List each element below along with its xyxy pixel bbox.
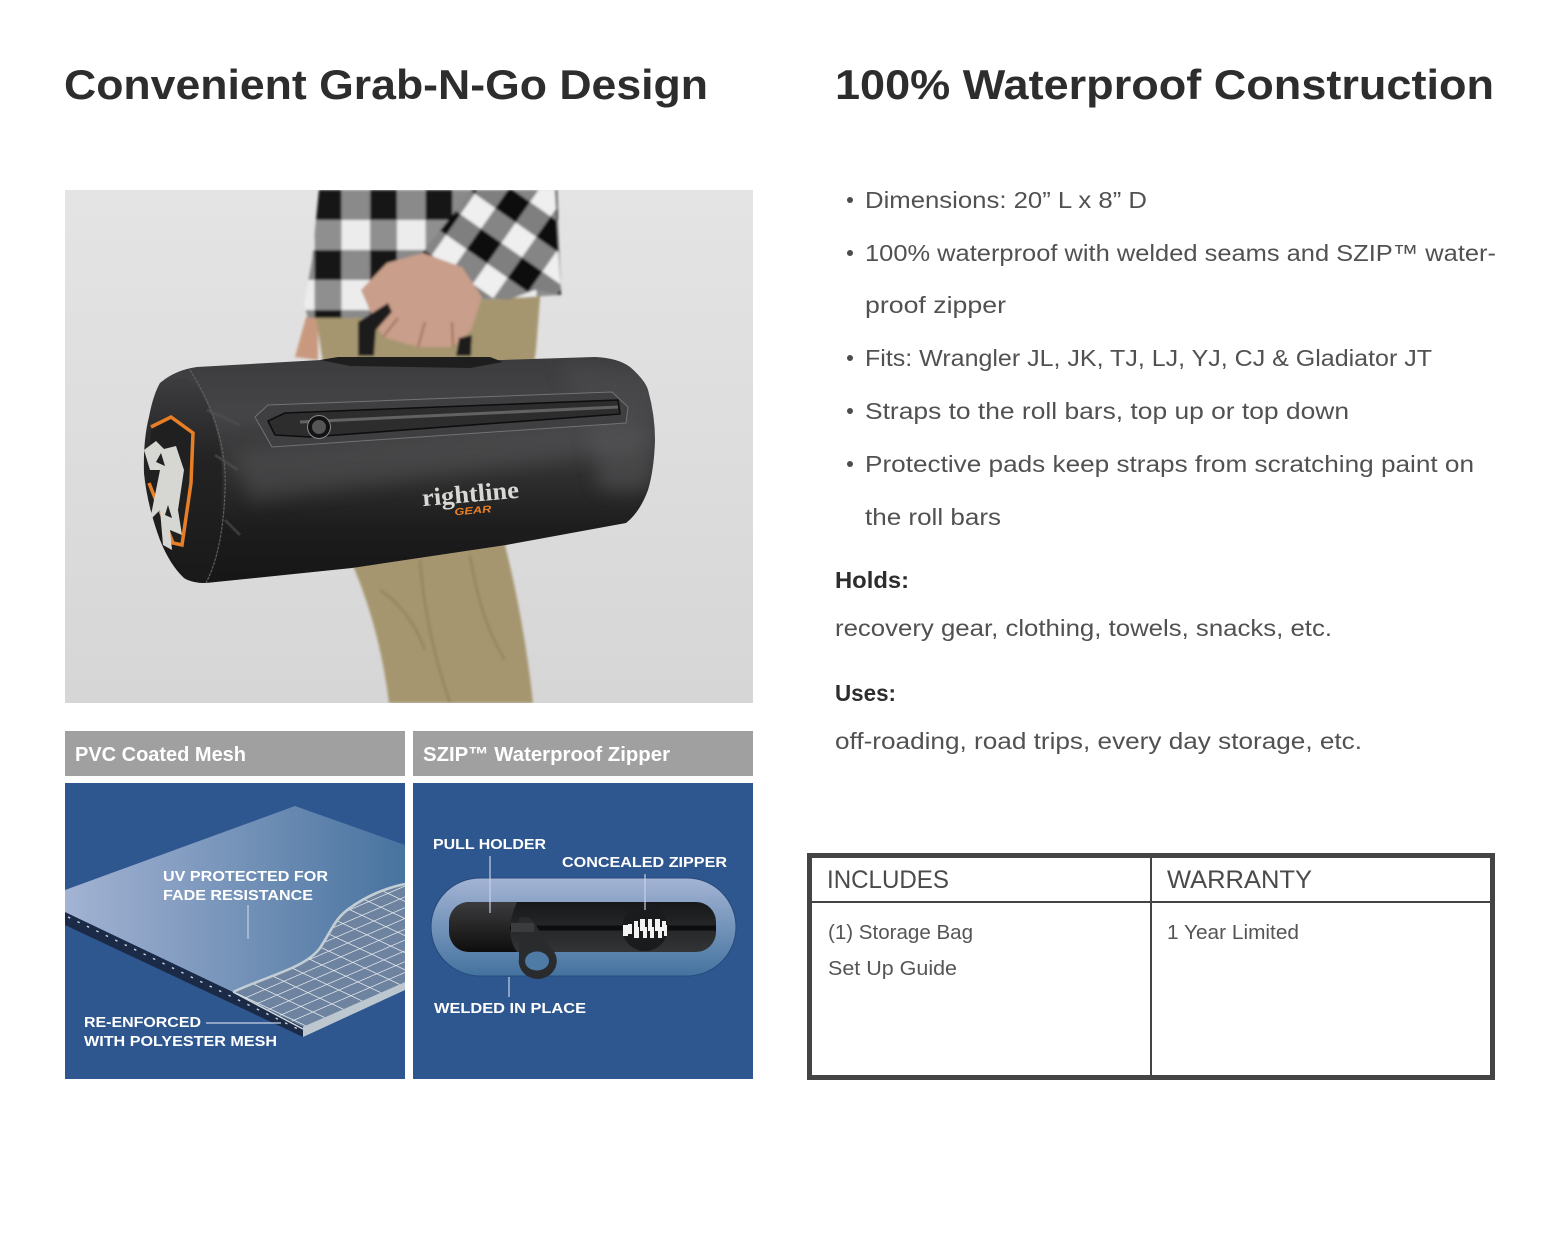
- edge stitching: [68, 917, 300, 1030]
- welded pill surround: [431, 878, 736, 976]
- text block: uses: off-roading, road trips, every day storage, etc.: [835, 728, 1362, 754]
- zipper: [255, 392, 628, 447]
- trouser folds: [380, 555, 505, 703]
- table: includes and warranty: INCLUDES: [827, 866, 949, 894]
- mesh outer edge: [303, 982, 405, 1037]
- feature bullet list: Straps to the roll bars, top up or top down: [865, 398, 1349, 424]
- exposed polyester mesh: [233, 884, 405, 1027]
- bag end cap: [144, 378, 222, 583]
- text block: uses: [835, 680, 1362, 754]
- header: PVC Coated Mesh: [65, 731, 405, 776]
- label: re-enforced mesh: [84, 1015, 281, 1050]
- header: PVC Coated Mesh: PVC Coated Mesh: [75, 743, 246, 766]
- bag handle strap: [358, 303, 472, 356]
- label: re-enforced mesh: RE-ENFORCED: [84, 1015, 201, 1031]
- text block: holds: [835, 567, 1332, 641]
- feature bullet list: [847, 187, 1496, 530]
- UV protected top sheet: [65, 806, 405, 992]
- text block: holds: recovery gear, clothing, towels, snacks, etc.: [835, 615, 1332, 641]
- text block: uses: Uses:: [835, 680, 896, 706]
- label: pull holder: [433, 837, 547, 913]
- bag wordmark: rightline: [421, 477, 520, 512]
- storage bag: [144, 357, 660, 583]
- zipper pull tab: [511, 917, 557, 979]
- feature bullet list: the roll bars: [865, 504, 1001, 530]
- label: UV protected: UV PROTECTED FOR: [163, 869, 329, 885]
- title: Convenient Grab-N-Go Design: Convenient Grab-N-Go Design: [64, 61, 708, 108]
- handle base patch: [320, 357, 503, 368]
- title: 100% Waterproof Construction: 100% Waterproof Construction: [835, 61, 1494, 108]
- header: SZIP Waterproof Zipper: [413, 731, 753, 776]
- pull holder: [449, 902, 517, 952]
- label: welded in place: WELDED IN PLACE: [434, 1001, 586, 1017]
- label: re-enforced mesh: WITH POLYESTER MESH: [84, 1034, 277, 1050]
- bag wordmark: GEAR: [454, 504, 493, 518]
- panel: SZIP waterproof zipper diagram: [413, 783, 753, 1079]
- feature bullet list: proof zipper: [865, 292, 1006, 318]
- text block: holds: Holds:: [835, 567, 909, 593]
- zipper channel: [449, 902, 716, 952]
- label: UV protected: [163, 869, 329, 939]
- sheet curved edge: [233, 884, 405, 992]
- feature bullet list: Dimensions: 20” L x 8” D: [865, 187, 1147, 213]
- left arm behind bag: [295, 317, 318, 360]
- table: includes and warranty: (1) Storage Bag: [828, 921, 973, 944]
- label: pull holder: PULL HOLDER: [433, 837, 547, 853]
- zipper teeth magnifier: [622, 905, 668, 951]
- feature bullet list: Fits: Wrangler JL, JK, TJ, LJ, YJ, CJ & Gladiator JT: [865, 345, 1432, 371]
- feature bullet list: Protective pads keep straps from scratching paint on: [865, 451, 1474, 477]
- dark sheet edge: [65, 912, 303, 1037]
- header: SZIP Waterproof Zipper: SZIP™ Waterproof Zipper: [423, 743, 670, 766]
- label: concealed zipper: CONCEALED ZIPPER: [562, 855, 728, 871]
- khaki trousers: [316, 272, 542, 703]
- shirt torso: [304, 190, 561, 318]
- table: includes and warranty: 1 Year Limited: [1167, 921, 1299, 944]
- label: UV protected: FADE RESISTANCE: [163, 888, 313, 904]
- product photo: person carrying storage bag: [65, 190, 753, 703]
- table: includes and warranty: WARRANTY: [1167, 866, 1312, 894]
- seam wrinkles: [207, 410, 240, 535]
- bag logo: orange shield: [144, 417, 193, 550]
- feature bullet list: 100% waterproof with welded seams and SZIP™ water-: [865, 240, 1496, 266]
- table: includes and warranty: Set Up Guide: [828, 957, 957, 980]
- hand: [361, 253, 482, 347]
- shirt sleeve: [422, 190, 561, 300]
- panel: PVC coated mesh diagram: [65, 783, 405, 1079]
- table: includes and warranty: [810, 856, 1492, 1078]
